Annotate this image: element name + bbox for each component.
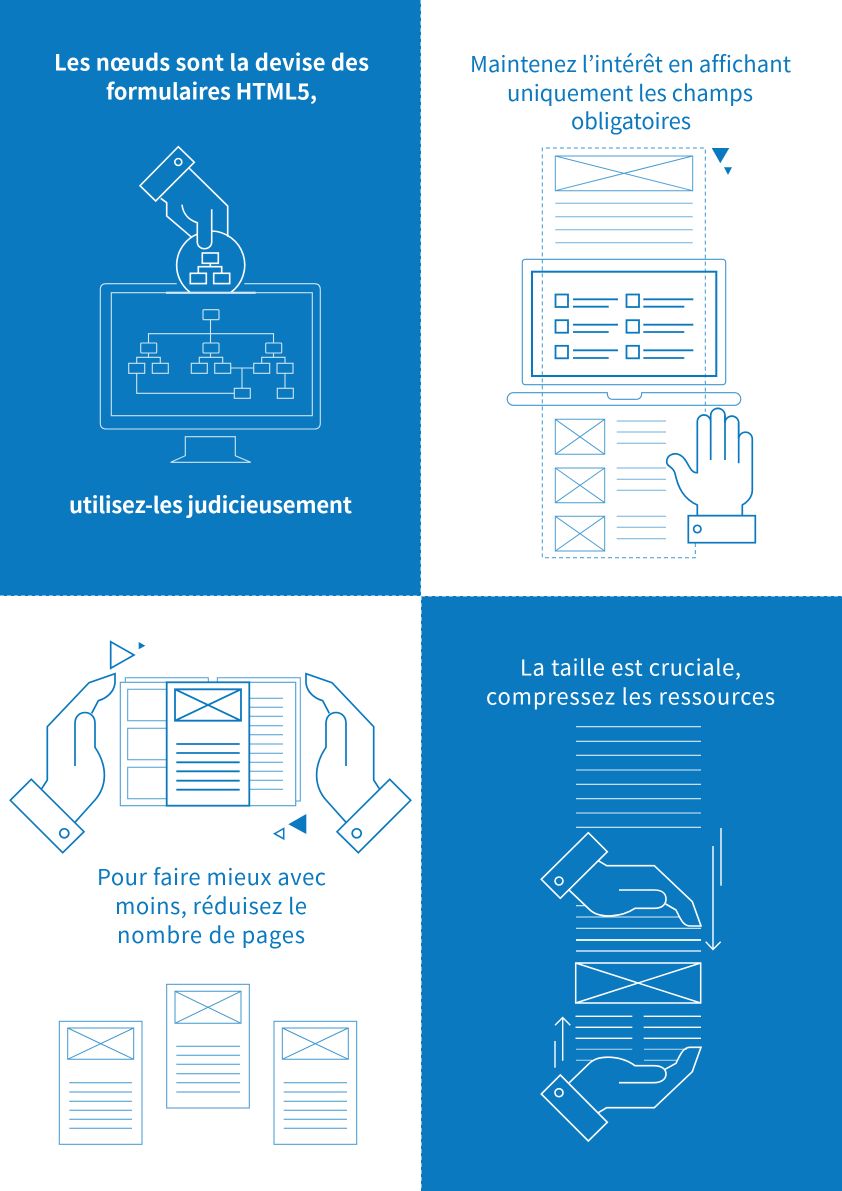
panel: nodes xyxy=(0,0,421,596)
heading: required fields: Maintenez l’intérêt en affichant xyxy=(470,47,791,79)
icon: triangles top xyxy=(111,642,145,668)
icon: hand dropping node coin xyxy=(140,147,256,293)
icon: monitor with org chart xyxy=(100,284,320,462)
page: centre xyxy=(167,984,249,1108)
wireframe image rows xyxy=(555,419,666,551)
panel: required fields xyxy=(470,47,791,558)
heading: nodes top: Les nœuds sont la devise des xyxy=(54,46,369,78)
text columns xyxy=(576,1016,701,1060)
heading: fewer pages: Pour faire mieux avec xyxy=(97,860,326,892)
arrow: up xyxy=(555,1018,570,1068)
heading: nodes bottom: utilisez-les judicieusement xyxy=(69,488,352,520)
heading: compress: La taille est cruciale, xyxy=(520,650,741,682)
heading: fewer pages: nombre de pages xyxy=(117,918,305,950)
icon: laptop xyxy=(507,259,741,405)
wireframe image xyxy=(576,963,701,1003)
heading: required fields: obligatoires xyxy=(571,104,691,136)
icon: triangles xyxy=(712,148,732,175)
icon: triangles bottom xyxy=(274,814,306,839)
page: left xyxy=(59,1021,142,1144)
heading: nodes top xyxy=(54,46,369,106)
icon: upper hand xyxy=(541,833,701,926)
panel: fewer pages xyxy=(10,642,411,1144)
panel: compress xyxy=(421,596,842,1191)
heading: fewer pages: moins, réduisez le xyxy=(115,889,307,921)
page: right xyxy=(274,1021,357,1144)
heading: nodes top: formulaires HTML5, xyxy=(106,74,317,106)
heading: compress xyxy=(486,650,775,712)
front page xyxy=(167,682,249,806)
icon: lower hand xyxy=(541,1047,701,1141)
heading: fewer pages xyxy=(97,860,326,950)
form checkboxes xyxy=(556,294,693,358)
wireframe header xyxy=(555,156,693,243)
icon: left hand xyxy=(10,674,115,853)
heading: compress: compressez les ressources xyxy=(486,680,775,712)
heading: required fields xyxy=(470,47,791,136)
text lines top xyxy=(576,727,701,951)
dashed page outline xyxy=(542,148,705,558)
icon: raised hand xyxy=(667,408,755,543)
arrow: down xyxy=(706,828,721,950)
org chart xyxy=(129,310,293,398)
heading: required fields: uniquement les champs xyxy=(507,76,753,108)
back pages xyxy=(120,678,300,806)
icon: right hand xyxy=(306,674,411,853)
